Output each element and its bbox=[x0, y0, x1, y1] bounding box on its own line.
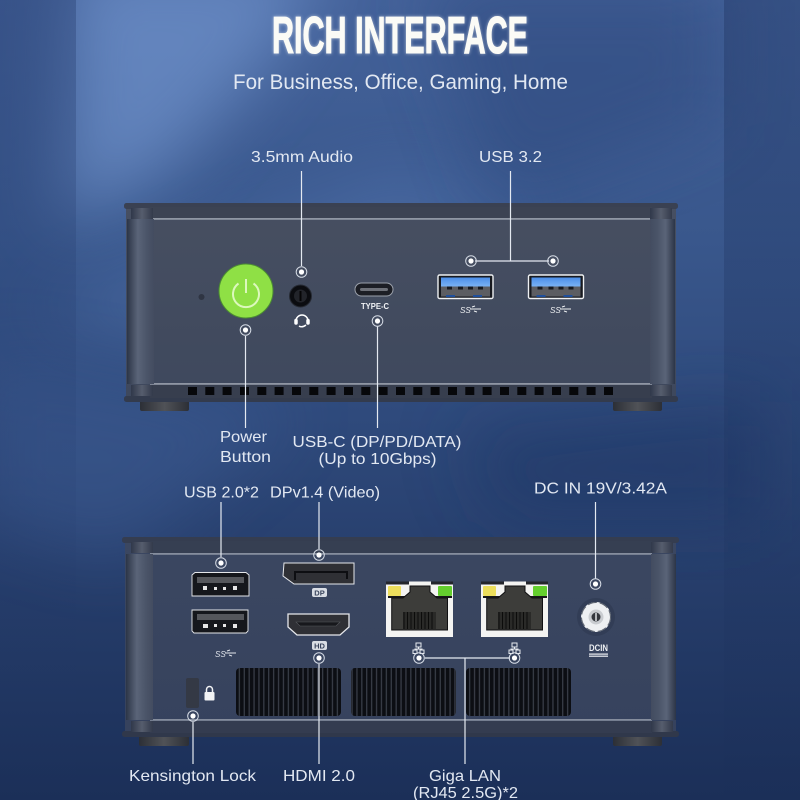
chassis bbox=[122, 537, 679, 737]
label: 3.5mm Audio: 3.5mm Audio bbox=[251, 149, 353, 166]
title: RICH INTERFACE bbox=[272, 7, 528, 65]
indicator hole bbox=[198, 294, 204, 300]
bottom vent slots bbox=[188, 387, 613, 395]
label: Power Button: Power bbox=[220, 429, 268, 446]
label: USB 2.0*2: USB 2.0*2 bbox=[184, 484, 259, 502]
label: DPv1.4 (Video): DPv1.4 (Video) bbox=[270, 484, 380, 502]
label: Giga LAN bbox=[413, 768, 518, 800]
icon: headset bbox=[295, 315, 309, 327]
label: Giga LAN: Giga LAN bbox=[429, 768, 501, 785]
icon: SuperSpeed logo right: SS bbox=[550, 306, 561, 315]
chassis bbox=[124, 203, 678, 402]
label: USB-C bbox=[292, 434, 462, 468]
subtitle: For Business, Office, Gaming, Home bbox=[233, 71, 568, 94]
HDMI logo: HD bbox=[314, 642, 325, 650]
USB-C port: TYPE-C bbox=[361, 302, 389, 311]
HDMI port bbox=[288, 614, 349, 635]
icon: SuperSpeed logo left bbox=[460, 306, 481, 315]
icon: SuperSpeed logo bbox=[215, 650, 236, 659]
DP logo bbox=[312, 588, 327, 598]
label: USB-C: USB-C (DP/PD/DATA) bbox=[292, 434, 462, 451]
HDMI logo bbox=[312, 641, 327, 650]
icon: network left bbox=[413, 643, 424, 654]
icon: SuperSpeed logo right bbox=[550, 306, 571, 315]
title: RICH INTERFACE bbox=[272, 7, 528, 65]
label: Power Button: Button bbox=[220, 449, 271, 466]
feet bbox=[140, 400, 662, 411]
LAN port right bbox=[481, 582, 548, 637]
Kensington lock slot bbox=[186, 678, 199, 708]
label: USB-C: (Up to 10Gbps) bbox=[318, 451, 436, 468]
USB 3.2 port right bbox=[528, 275, 584, 298]
icon: SuperSpeed logo left: SS bbox=[460, 306, 471, 315]
USB 2.0 port top bbox=[192, 572, 249, 596]
title bbox=[272, 7, 528, 65]
icon: power button bbox=[219, 264, 273, 318]
label: HDMI 2.0: HDMI 2.0 bbox=[283, 768, 355, 785]
label: Kensington Lock: Kensington Lock bbox=[129, 768, 257, 785]
icon: audio jack bbox=[290, 285, 312, 307]
DCIN logo: DCIN bbox=[589, 643, 608, 653]
DisplayPort port bbox=[283, 563, 354, 584]
feet bbox=[139, 735, 662, 746]
leader lines and callout dots bbox=[188, 171, 601, 764]
DP logo: DP bbox=[314, 588, 325, 598]
label: USB 3.2: USB 3.2 bbox=[479, 149, 542, 166]
panel: rear of mini PC bbox=[122, 537, 679, 746]
label: Power Button bbox=[220, 429, 271, 466]
DCIN logo bbox=[589, 643, 608, 657]
icon: SuperSpeed logo: SS bbox=[215, 650, 226, 659]
icon: network right bbox=[509, 643, 520, 654]
USB 2.0 port bottom bbox=[192, 610, 248, 633]
label: DC IN: DC IN 19V/3.42A bbox=[534, 480, 667, 498]
LAN port left bbox=[386, 582, 453, 637]
USB 3.2 port left bbox=[438, 275, 493, 298]
panel: front of mini PC bbox=[124, 203, 678, 411]
DC in jack bbox=[577, 598, 615, 636]
icon: padlock bbox=[204, 686, 214, 700]
ventilation grilles bbox=[236, 668, 571, 716]
USB-C port bbox=[355, 283, 393, 311]
